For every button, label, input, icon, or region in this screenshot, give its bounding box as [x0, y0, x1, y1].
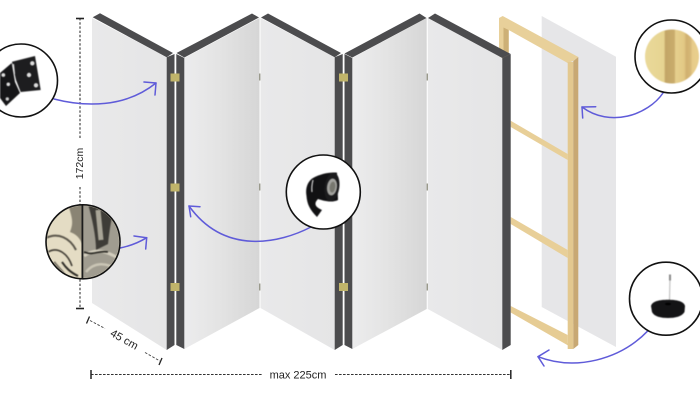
- icon: black hinge: [0, 56, 41, 106]
- depth label: 45 cm: [108, 327, 140, 353]
- callout: print pattern: [46, 204, 122, 280]
- icon: foot with pin: [651, 274, 685, 318]
- wood grain swatch: [645, 30, 699, 84]
- callout: hinge: [0, 44, 58, 117]
- dark panel edges: [93, 13, 511, 350]
- arrow: hinge: [54, 82, 156, 104]
- arrow: wood: [582, 93, 663, 118]
- brass hinges: [170, 74, 348, 291]
- panel 3: [260, 18, 335, 350]
- icon: tape roll: [306, 172, 341, 217]
- print texture: [46, 204, 122, 280]
- width label: max 225cm: [270, 370, 326, 382]
- height label: 172cm: [74, 147, 86, 179]
- wooden frame: [499, 16, 578, 349]
- grey backing sheet: [542, 16, 616, 347]
- callout: felt foot: [630, 262, 700, 335]
- callout: tape: [286, 155, 360, 229]
- panel 1: [92, 18, 167, 350]
- arrow: print: [120, 236, 147, 249]
- panel 4: [352, 18, 427, 349]
- depth dimension: [86, 316, 162, 365]
- arrow: foot: [538, 331, 648, 366]
- panel 2: [184, 18, 260, 349]
- callout: wood sample: [635, 20, 700, 93]
- panel 5: [428, 18, 502, 350]
- arrow: tape: [189, 206, 311, 241]
- small fold hinges: [259, 74, 428, 290]
